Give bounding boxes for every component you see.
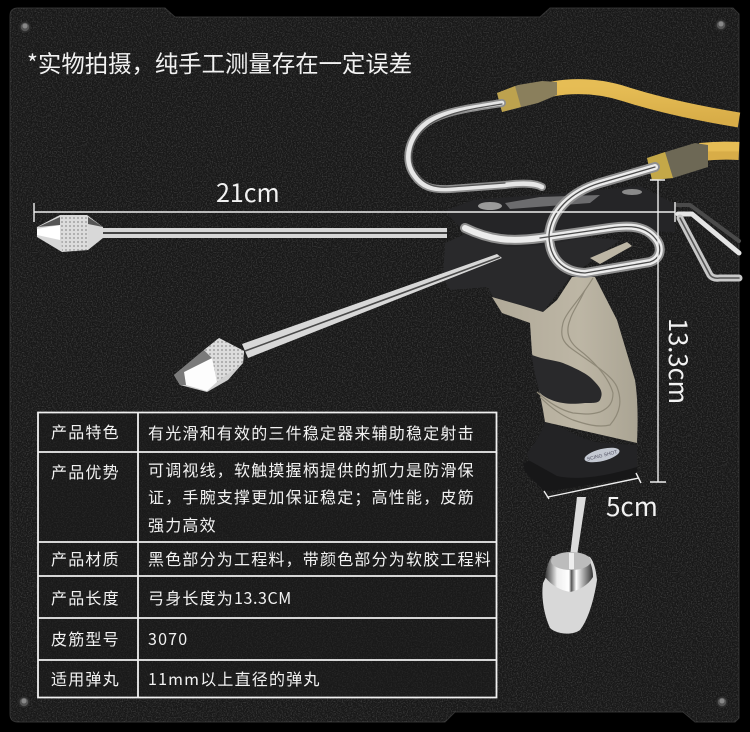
row: band model: 3070 <box>148 626 188 650</box>
dimension: 21cm: 21cm <box>216 174 280 210</box>
product: slingshot <box>37 81 739 634</box>
screw: top right <box>716 20 726 30</box>
dimension: 21cm <box>34 174 675 222</box>
row: advantages: 强力高效 <box>148 517 217 535</box>
upper stabiliser wire <box>408 103 542 189</box>
dimension: 13.3cm <box>650 180 698 482</box>
row: ammo <box>51 666 321 690</box>
stabiliser pin: angled <box>174 254 502 392</box>
dimension: 13.3cm: 13.3cm <box>661 318 698 404</box>
row: advantages: 可调视线，软触摸握柄提供的抓力是防滑保 <box>148 462 475 480</box>
dimension: 5cm <box>544 473 658 524</box>
row: length: 产品长度 <box>51 590 120 608</box>
logo badge <box>583 445 621 465</box>
lower rubber band <box>647 143 739 180</box>
dimension: 5cm: 5cm <box>606 487 658 524</box>
screw: bottom left <box>19 697 29 707</box>
bottom black butt <box>527 422 637 481</box>
stabiliser pin: horizontal <box>37 215 447 252</box>
row: features <box>51 424 475 443</box>
row: features: 有光滑和有效的三件稳定器来辅助稳定射击 <box>148 425 475 443</box>
tan grip <box>492 277 638 443</box>
table grid <box>38 412 496 698</box>
row: advantages: 证，手腕支撑更加保证稳定；高性能，皮筋 <box>148 489 475 507</box>
specification table <box>38 412 496 698</box>
row: features: 产品特色 <box>51 424 120 442</box>
row: ammo: 适用弹丸 <box>51 671 120 689</box>
row: advantages <box>51 462 475 535</box>
row: material: 产品材质 <box>51 551 120 569</box>
logo badge: SCING SHOT <box>586 449 618 463</box>
row: band model <box>51 626 188 650</box>
upper rubber band <box>497 81 739 120</box>
row: advantages: 产品优势 <box>51 464 120 482</box>
screw: top left <box>20 22 30 32</box>
row: ammo: 11mm以上直径的弹丸 <box>148 666 321 690</box>
tan sliver through wire loop <box>590 242 632 264</box>
black grip inset <box>532 355 602 404</box>
front stabiliser wire <box>465 167 660 273</box>
row: band model: 皮筋型号 <box>51 631 120 649</box>
row: length <box>51 585 292 609</box>
lower body <box>443 232 620 312</box>
row: length: 弓身长度为13.3CM <box>148 585 292 609</box>
title note: *实物拍摄，纯手工测量存在一定误差 <box>27 45 412 79</box>
row: material: 黑色部分为工程料，带颜色部分为软胶工程料 <box>148 551 492 569</box>
base plate <box>523 461 637 492</box>
stabiliser pin: vertical <box>542 497 597 634</box>
grip contour lines <box>537 278 620 426</box>
right wrist strut wire <box>677 205 739 278</box>
top plate <box>447 186 675 247</box>
screw: bottom right <box>717 697 727 707</box>
